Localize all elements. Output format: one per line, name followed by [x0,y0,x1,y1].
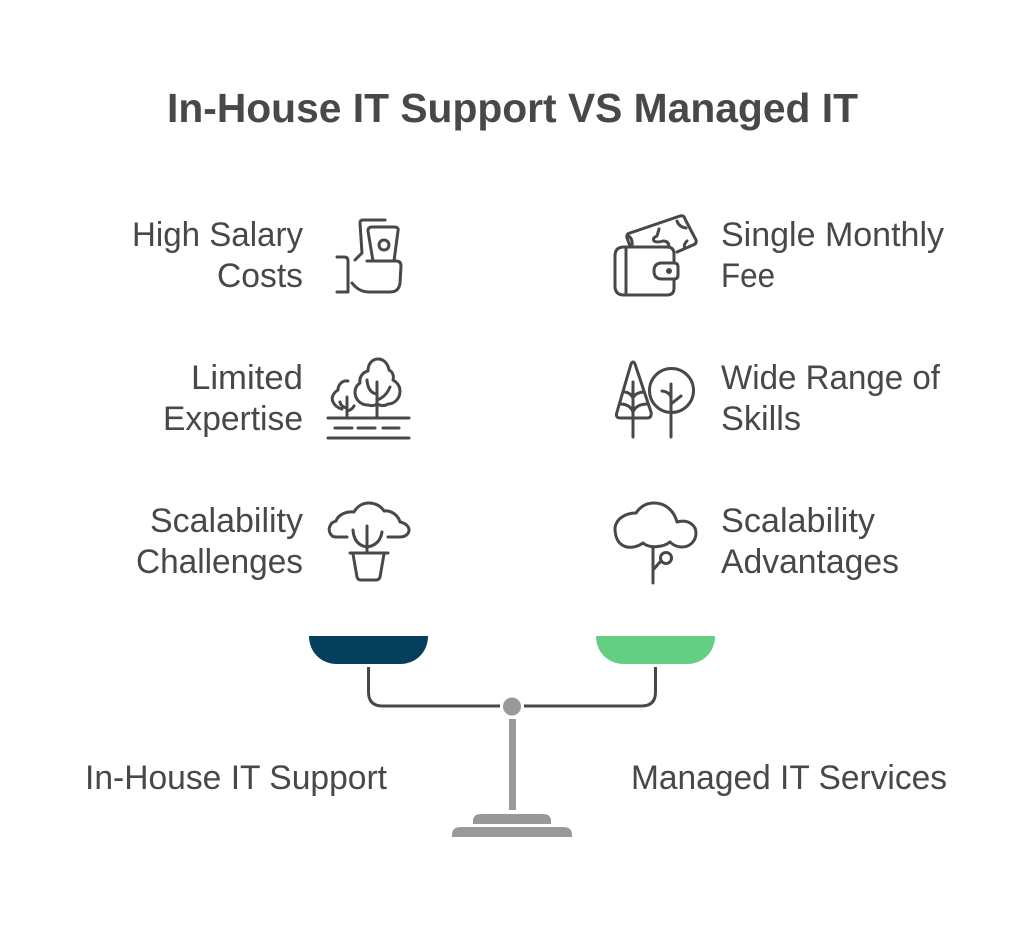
label: Limited Expertise: Expertise [163,400,303,438]
left pan [309,636,428,664]
right pan [596,636,715,664]
title: In-House IT Support VS Managed IT [167,85,858,131]
icon: wallet with banknote [615,216,696,295]
label: Scalability Advantages: Scalability [721,502,875,540]
label: Wide Range of Skills [721,359,941,438]
lower base [452,827,572,837]
upper base [473,814,551,824]
label: High Salary Costs: High Salary [132,216,303,254]
beam [368,667,656,706]
label: Scalability Challenges: Scalability [150,502,303,540]
label: Managed IT Services: Managed IT Services [631,759,947,797]
icon: conifer and round tree [616,362,694,437]
balance scale [309,636,715,837]
label: Scalability Advantages [721,502,899,581]
icon: cloud tree [615,503,696,583]
label: Scalability Challenges [136,502,303,581]
label: Wide Range of Skills: Wide Range of [721,359,941,397]
label: Single Monthly Fee: Single Monthly [721,216,944,254]
label: Scalability Challenges: Challenges [136,543,303,581]
label: Limited Expertise [163,359,303,438]
icon: trees on ground [328,359,409,438]
pivot [503,698,521,716]
icon: potted plant [329,503,409,580]
label: High Salary Costs [132,216,303,295]
label: High Salary Costs: Costs [217,257,303,295]
label: Scalability Advantages: Advantages [721,543,899,581]
post [509,719,516,810]
label: Limited Expertise: Limited [191,359,303,397]
label: Single Monthly Fee: Fee [721,257,775,295]
label: Single Monthly Fee [721,216,944,295]
icon: hand holding money [337,220,401,292]
label: In-House IT Support: In-House IT Support [85,759,388,797]
label: Wide Range of Skills: Skills [721,400,801,438]
